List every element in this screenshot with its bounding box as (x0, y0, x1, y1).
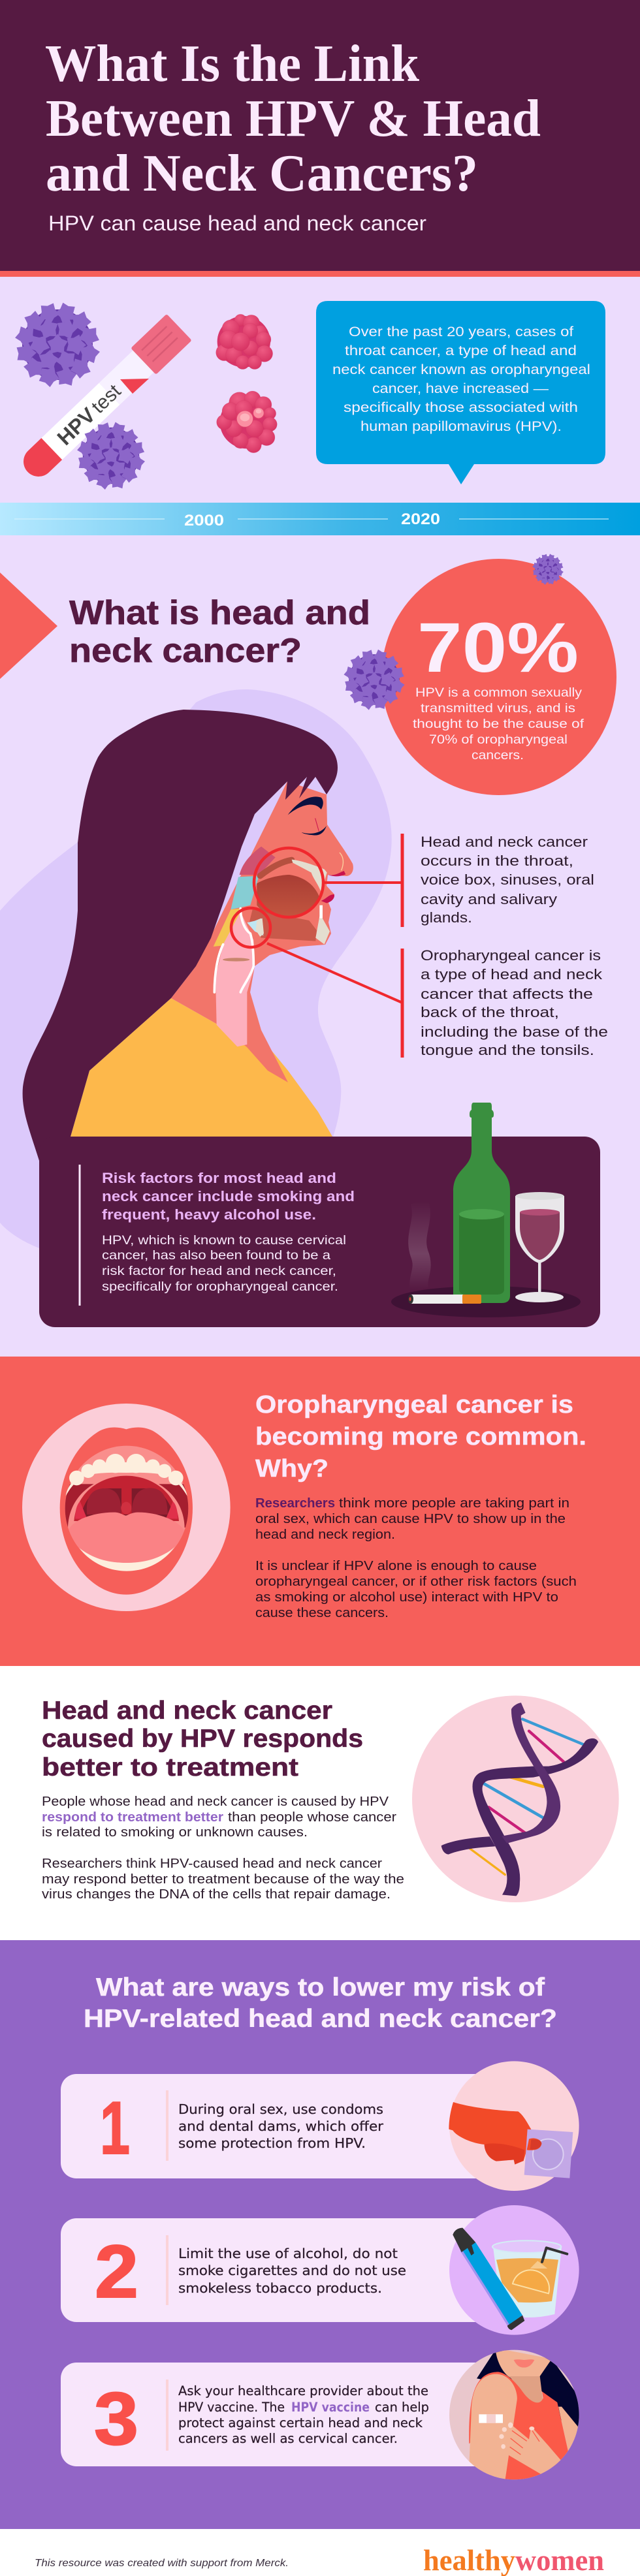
oropharyngeal body: Researchers (255, 1496, 335, 1511)
risk heading: Risk factors for most head and (102, 1170, 336, 1186)
heading: what is head and neck cancer (69, 594, 370, 670)
icon: virus small (75, 418, 148, 491)
title: What Is the Link (45, 35, 419, 93)
treatment body: virus changes the DNA of the cells that repair damage. (42, 1887, 391, 1902)
text: oropharyngeal definition (421, 947, 608, 1058)
card 2: smokeless tobacco products. (178, 2280, 382, 2296)
risk heading (102, 1170, 355, 1223)
card 3: 3 (94, 2378, 138, 2460)
stat circle: 70%: thought to be the cause of (413, 717, 584, 731)
illustration: woman profile (23, 710, 353, 1169)
stat circle: 70% (381, 559, 616, 795)
timeline band: 2000 (184, 512, 224, 529)
text: oropharyngeal definition: including the base of the (421, 1024, 608, 1040)
callout: speech bubble: specifically those associated with (344, 400, 578, 415)
oropharyngeal body: It is unclear if HPV alone is enough to cause (255, 1559, 537, 1573)
treatment heading: better to treatment (42, 1753, 298, 1782)
icon: HPV test tube: test (88, 380, 125, 418)
stat circle: 70%: 70% (417, 608, 579, 687)
title (45, 35, 541, 202)
text: head and neck definition: Head and neck cancer (421, 834, 588, 850)
icon: cigarette (408, 1295, 481, 1304)
icon: woman with vaccine bandage (449, 2348, 581, 2483)
logo: healthywomen (423, 2543, 604, 2576)
icon: virus large (12, 298, 104, 389)
logo: healthywomen: healthy (423, 2543, 515, 2576)
treatment body: may respond better to treatment because of the way the (42, 1872, 404, 1887)
callout: speech bubble (316, 301, 605, 484)
text: oropharyngeal definition: a type of head and neck (421, 966, 603, 982)
callout: speech bubble: cancer, have increased — (372, 381, 549, 396)
icon: vape and drink (449, 2205, 579, 2335)
card 3: cancers as well as cervical cancer. (178, 2431, 398, 2446)
oropharyngeal heading: Why? (255, 1455, 328, 1483)
treatment body: Researchers think HPV-caused head and neck cancer (42, 1857, 382, 1871)
icon: virus on circle top (532, 552, 565, 586)
throat anatomy (214, 796, 345, 1046)
panel: risk factors (39, 1103, 600, 1327)
callout: speech bubble: Over the past 20 years, cases of (349, 324, 573, 339)
card 3: HPV vaccine. The (178, 2400, 285, 2415)
subtitle: HPV can cause head and neck cancer (48, 212, 426, 235)
oropharyngeal heading: becoming more common. (255, 1423, 586, 1451)
icon: hand with condom (449, 2061, 579, 2191)
card 1: and dental dams, which offer (178, 2118, 384, 2134)
text: oropharyngeal definition: back of the throat, (421, 1004, 559, 1020)
tube red level mark (120, 379, 149, 394)
callout: speech bubble: neck cancer known as oropharyngeal (332, 362, 590, 377)
stat circle: 70%: 70% of oropharyngeal (429, 732, 568, 747)
oropharyngeal body (255, 1496, 577, 1620)
card 3: Ask your healthcare provider about the (178, 2383, 428, 2398)
eyebrow (288, 796, 323, 815)
risk body (102, 1233, 346, 1294)
icon: healthy tissue cluster (216, 314, 273, 369)
logo: healthywomen: women (515, 2543, 604, 2576)
treatment heading (42, 1697, 363, 1782)
lower risk heading: HPV-related head and neck cancer? (84, 2005, 557, 2033)
oropharyngeal body: oropharyngeal cancer, or if other risk factors (such (255, 1575, 577, 1589)
timeline band: 2020 (401, 510, 440, 528)
icon: virus on circle left (342, 646, 408, 712)
stat circle: 70%: HPV is a common sexually (415, 685, 582, 700)
treatment body: respond to treatment better (42, 1810, 223, 1825)
icon: wine glass (515, 1192, 564, 1302)
oropharyngeal heading (255, 1391, 586, 1483)
risk body: cancer, has also been found to be a (102, 1248, 330, 1263)
treatment body: is related to smoking or unknown causes. (42, 1825, 308, 1840)
title: and Neck Cancers? (46, 145, 478, 202)
card 3: protect against certain head and neck (178, 2415, 423, 2430)
text: head and neck definition: cavity and salivary (421, 891, 557, 907)
icon: tissue cluster with lesions (217, 391, 277, 453)
oropharyngeal heading: Oropharyngeal cancer is (255, 1391, 573, 1419)
lavender background panel (0, 277, 640, 1357)
tonsil highlight circle (231, 908, 270, 947)
text: head and neck definition: occurs in the throat, (421, 853, 573, 869)
text: oropharyngeal definition: cancer that affects the (421, 986, 593, 1002)
treatment heading: Head and neck cancer (42, 1697, 332, 1725)
callout: speech bubble: throat cancer, a type of head and (345, 343, 577, 358)
text: head and neck definition: voice box, sinuses, oral (421, 872, 594, 888)
card 2: smoke cigarettes and do not use (178, 2263, 406, 2278)
hair (23, 710, 338, 1169)
card 1: During oral sex, use condoms (178, 2101, 383, 2117)
card 3 (61, 2348, 581, 2483)
treatment heading: caused by HPV responds (42, 1725, 363, 1753)
heading: what is head and neck cancer: neck cancer? (69, 632, 302, 670)
footer credit: This resource was created with support from Merck. (35, 2558, 289, 2569)
background blob (0, 689, 392, 1248)
treatment body (42, 1795, 404, 1902)
oropharyngeal body: think more people are taking part in (339, 1496, 569, 1511)
timeline band (0, 503, 640, 535)
text: head and neck definition: glands. (421, 909, 472, 926)
icon: open mouth (22, 1404, 231, 1611)
risk heading: frequent, heavy alcohol use. (102, 1206, 316, 1223)
eye lash (302, 826, 327, 836)
panel: oropharyngeal section (0, 1357, 640, 1666)
title: Between HPV & Head (46, 90, 541, 148)
treatment body: People whose head and neck cancer is caused by HPV (42, 1795, 389, 1809)
smoke (417, 1201, 422, 1289)
lower risk heading: What are ways to lower my risk of (96, 1973, 545, 2002)
panel: lower risk section (0, 1940, 640, 2529)
table shadow (391, 1286, 581, 1317)
lower risk heading (84, 1973, 557, 2033)
stat circle: 70%: transmitted virus, and is (421, 701, 575, 715)
oropharyngeal body: as smoking or alcohol use) interact with HPV to (255, 1590, 558, 1605)
risk heading: neck cancer include smoking and (102, 1188, 355, 1204)
text: head and neck definition (421, 834, 594, 926)
connector lines (267, 834, 402, 1058)
card 1 (61, 2061, 579, 2191)
card 1: some protection from HPV. (178, 2135, 366, 2151)
text: oropharyngeal definition: tongue and the tonsils. (421, 1042, 594, 1058)
oropharyngeal body: head and neck region. (255, 1528, 395, 1542)
text: oropharyngeal definition: Oropharyngeal cancer is (421, 947, 601, 964)
skin (171, 781, 353, 1082)
decorative arrow triangle (0, 573, 57, 679)
stat circle: 70%: cancers. (472, 748, 524, 762)
oropharyngeal body: oral sex, which can cause HPV to show up in the (255, 1512, 566, 1526)
panel: treatment response section (0, 1666, 640, 1940)
footer (0, 2529, 640, 2576)
card 2: 2 (95, 2231, 138, 2314)
oropharyngeal body: cause these cancers. (255, 1606, 389, 1620)
card 1: 1 (100, 2087, 130, 2170)
treatment body: than people whose cancer (228, 1810, 396, 1825)
card 3: HPV vaccine (291, 2400, 370, 2415)
icon: DNA helix (412, 1695, 619, 1902)
callout: speech bubble: human papillomavirus (HPV). (360, 418, 562, 434)
risk body: HPV, which is known to cause cervical (102, 1233, 346, 1248)
icon: wine bottle (453, 1103, 510, 1303)
card 2: Limit the use of alcohol, do not (178, 2246, 398, 2261)
icon: HPV test tube: HPV (53, 403, 100, 450)
heading: what is head and neck cancer: What is head and (69, 594, 370, 632)
lips (327, 871, 345, 876)
icon: HPV test tube (15, 314, 192, 485)
risk body: risk factor for head and neck cancer, (102, 1264, 336, 1278)
card 3: can help (375, 2400, 429, 2415)
mouth highlight circle (254, 848, 323, 917)
header panel (0, 0, 640, 277)
shirt (71, 998, 332, 1137)
card 2 (61, 2205, 579, 2335)
risk body: specifically for oropharyngeal cancer. (102, 1280, 338, 1294)
